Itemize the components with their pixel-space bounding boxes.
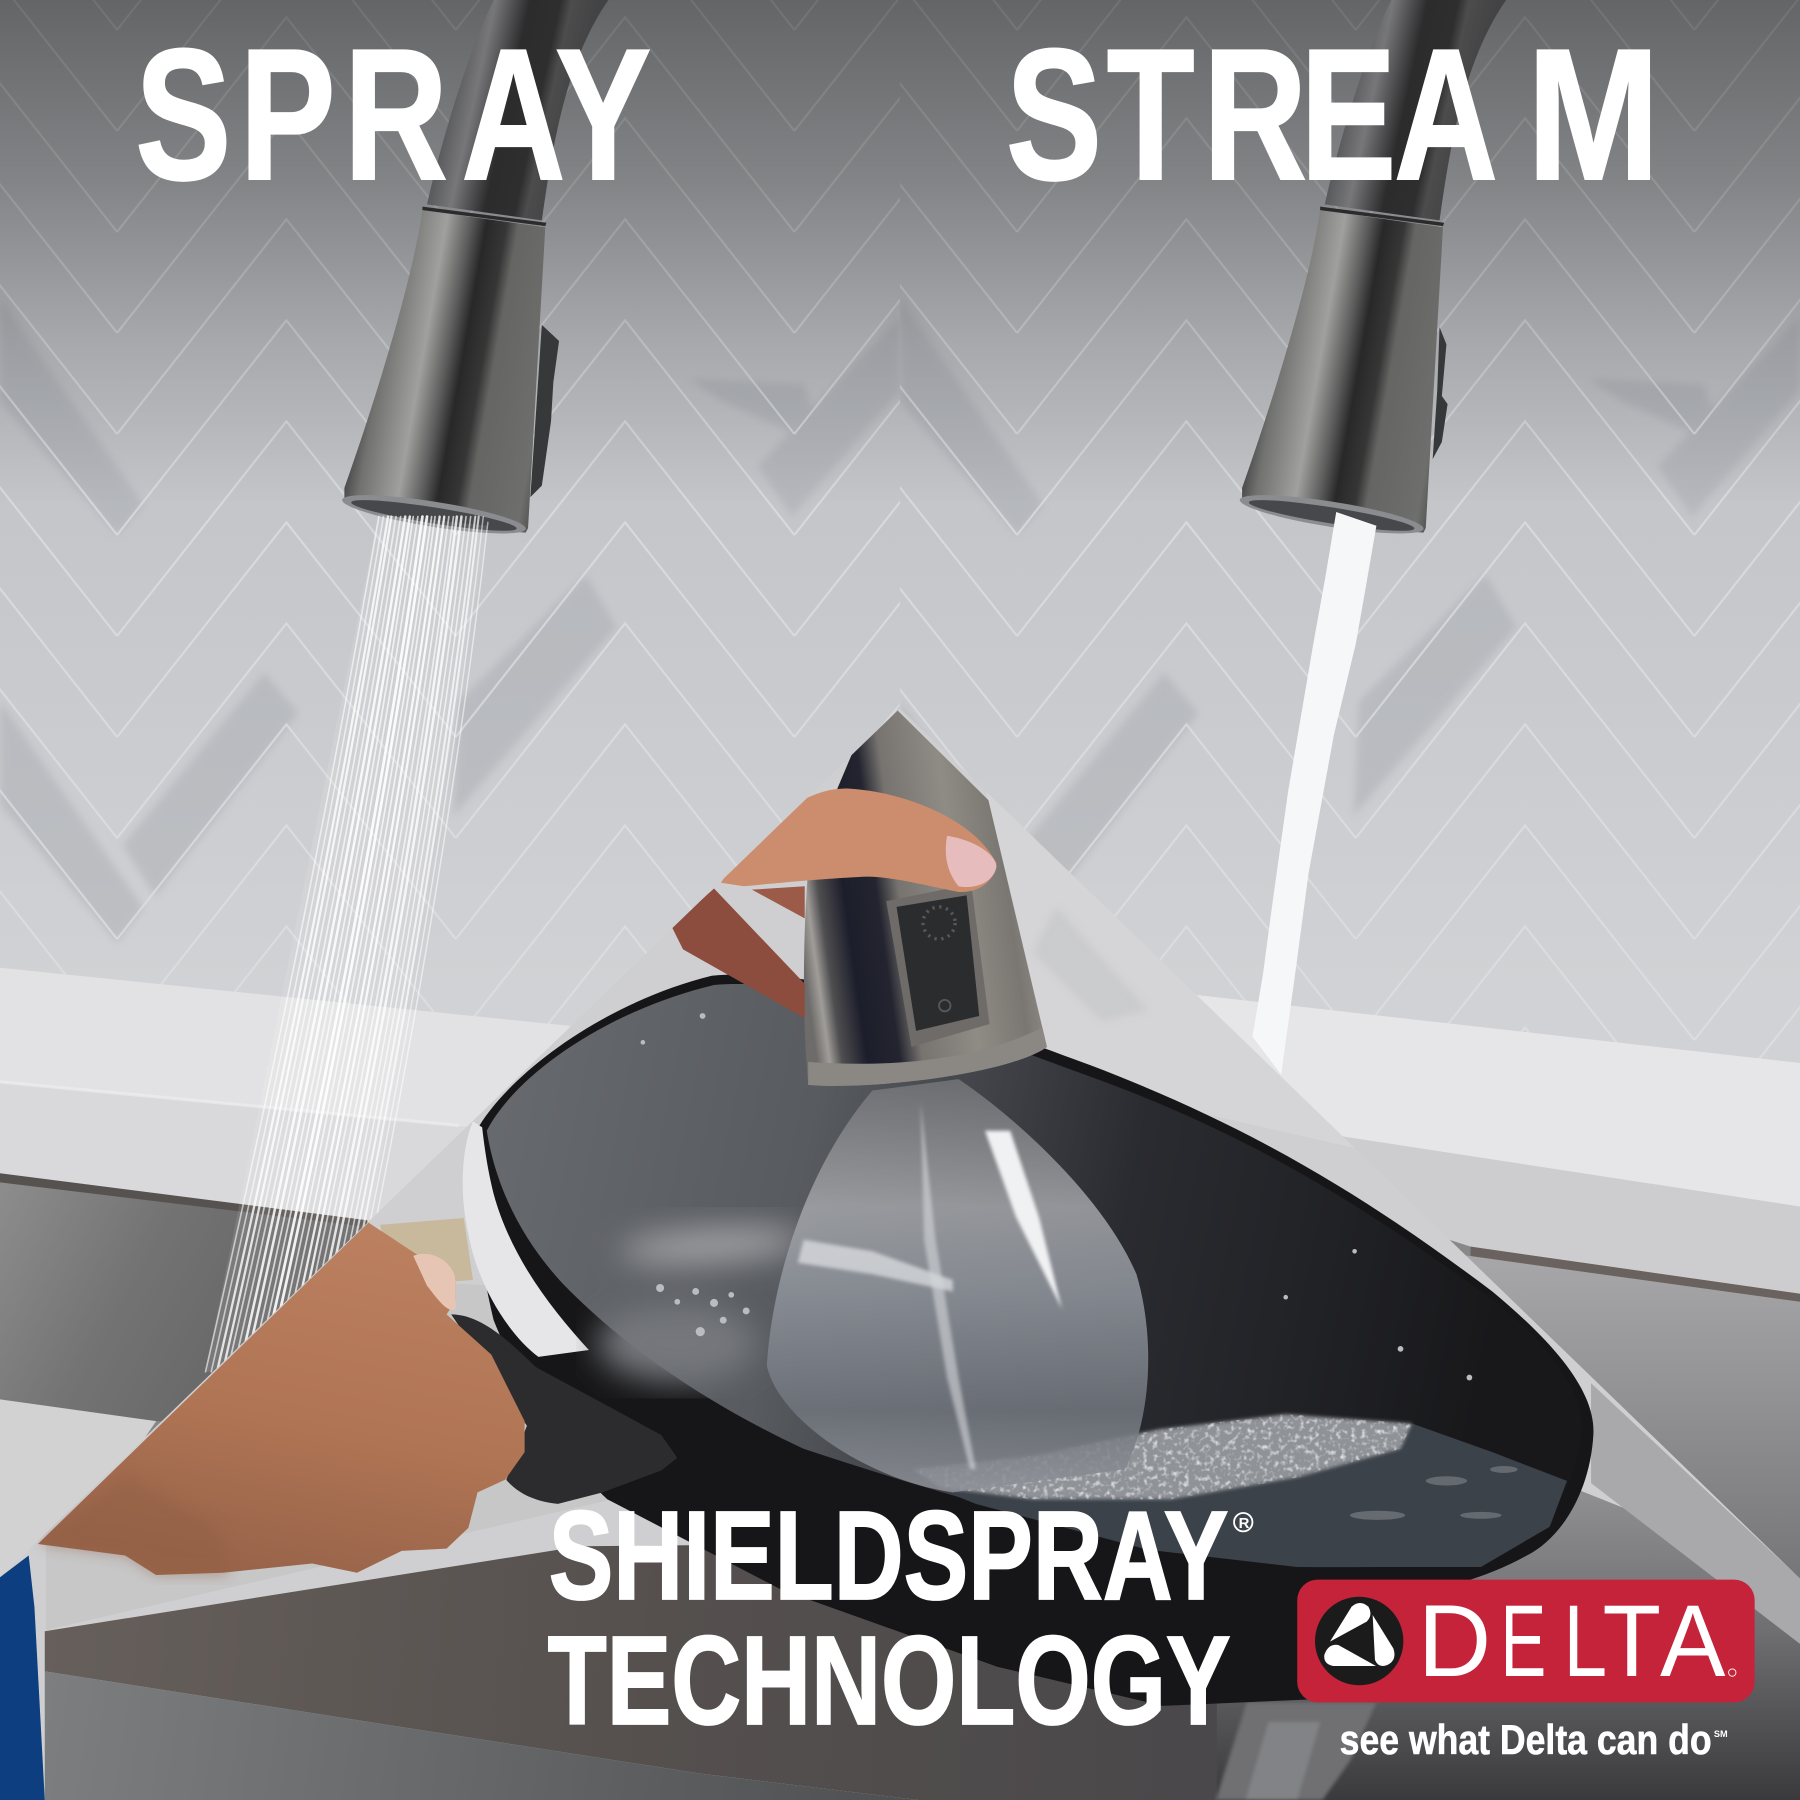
button icons [923, 907, 955, 1011]
title: stream [1006, 10, 1660, 219]
stream water [1252, 512, 1376, 1074]
pan cooking surface [486, 984, 1425, 1568]
water cone highlights [798, 1102, 1062, 1469]
pan outer body [475, 974, 1593, 1706]
delta wordmark [1418, 1584, 1725, 1698]
water cone [767, 1079, 1148, 1492]
delta wordmark: D [1418, 1584, 1491, 1698]
spray water jets [205, 514, 488, 1372]
title letter m: M [1527, 10, 1660, 219]
title letters s-t-r-e-a: STREA [1006, 11, 1498, 219]
spray button [530, 325, 559, 497]
faucet head: spray [340, 0, 608, 541]
delta registered mark [1729, 1669, 1736, 1676]
handle of pan [451, 1314, 677, 1504]
spray panel countertop [0, 968, 900, 1607]
thumbnail [413, 1254, 456, 1310]
heading: shieldspray technology [548, 1485, 1252, 1751]
delta wordmark: T [1603, 1584, 1661, 1698]
stream button [1433, 327, 1448, 459]
service mark: SM [1714, 1729, 1728, 1739]
pan silver side [463, 1122, 589, 1357]
faucet head: stream [1238, 0, 1506, 541]
fingernail [946, 836, 996, 887]
registered mark [1234, 1513, 1252, 1532]
heading line one: SHIELDSPRAY [549, 1485, 1228, 1626]
droplets [641, 1013, 1472, 1380]
logo emblem [1315, 1597, 1403, 1685]
registered mark: R [1239, 1515, 1250, 1532]
stream panel countertop [1148, 990, 1800, 1607]
panel: spray background tile wall [0, 0, 900, 1607]
frying pan [451, 974, 1593, 1706]
delta wordmark: E [1500, 1584, 1546, 1698]
scene backdrop [0, 708, 1800, 1800]
middle finger [752, 886, 805, 918]
tagline: see what Delta can do [1340, 1717, 1712, 1763]
blue sleeve [0, 1555, 45, 1800]
pan surface highlight [597, 1223, 804, 1382]
heading line two: TECHNOLOGY [548, 1610, 1231, 1751]
sprayer head held in hand [672, 709, 1047, 1086]
delta wordmark: L [1564, 1584, 1607, 1698]
title: spray: SPRAY [135, 11, 651, 219]
waterfall from pan [1216, 1702, 1376, 1800]
water foam [913, 1414, 1412, 1499]
water in pan [918, 1423, 1567, 1567]
wrist shadow [38, 1475, 230, 1575]
panel: shieldspray pan scene [0, 708, 1800, 1800]
pressing finger [721, 789, 996, 892]
hand holding pan [38, 1223, 525, 1575]
lower finger [672, 889, 805, 1018]
water ripples [1350, 1466, 1518, 1520]
delta logo badge [1297, 1580, 1755, 1702]
delta wordmark: A [1660, 1584, 1725, 1698]
panel: stream background tile wall [900, 0, 1800, 1607]
sprayer button [886, 884, 990, 1047]
